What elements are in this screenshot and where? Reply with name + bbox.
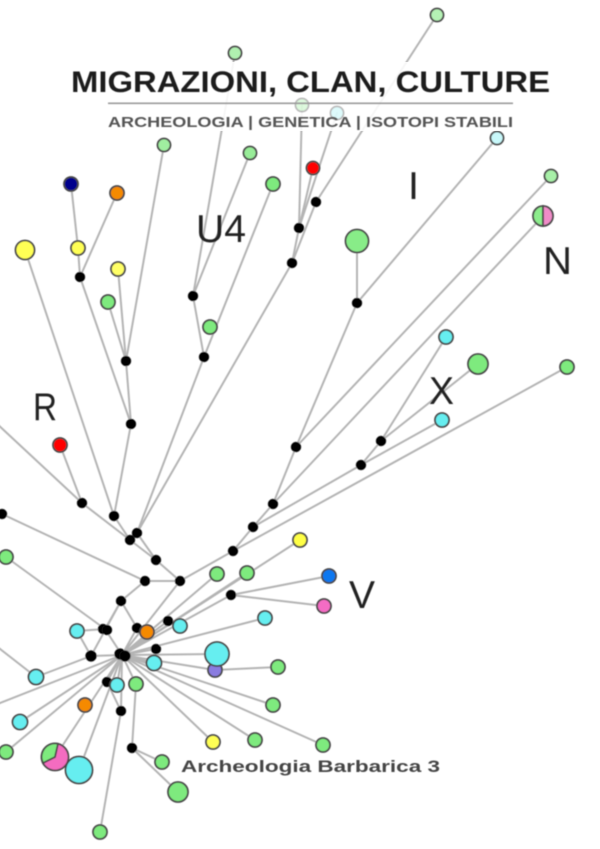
- sample nodes: central cluster: [0, 550, 285, 677]
- sample nodes: lower fan: [0, 670, 330, 839]
- faded nodes behind title: [296, 98, 344, 120]
- label R: R: [33, 386, 57, 429]
- label I: I: [408, 165, 419, 208]
- label X: X: [429, 370, 454, 413]
- haplogroup labels: [33, 165, 572, 617]
- series name: Archeologia Barbarica 3: [181, 757, 440, 776]
- label U4: U4: [196, 208, 246, 251]
- label N: N: [543, 240, 572, 283]
- label V: V: [349, 574, 375, 617]
- title: MIGRAZIONI, CLAN, CULTURE: [71, 66, 550, 99]
- title block: [71, 66, 550, 131]
- title rule: [108, 102, 513, 104]
- sample nodes: upper branches: [16, 8, 558, 452]
- subtitle: ARCHEOLOGIA | GENETICA | ISOTOPI STABILI: [108, 114, 513, 131]
- junction nodes: [0, 197, 386, 753]
- title band veil: [60, 62, 522, 131]
- sample nodes: right branches: [293, 330, 574, 613]
